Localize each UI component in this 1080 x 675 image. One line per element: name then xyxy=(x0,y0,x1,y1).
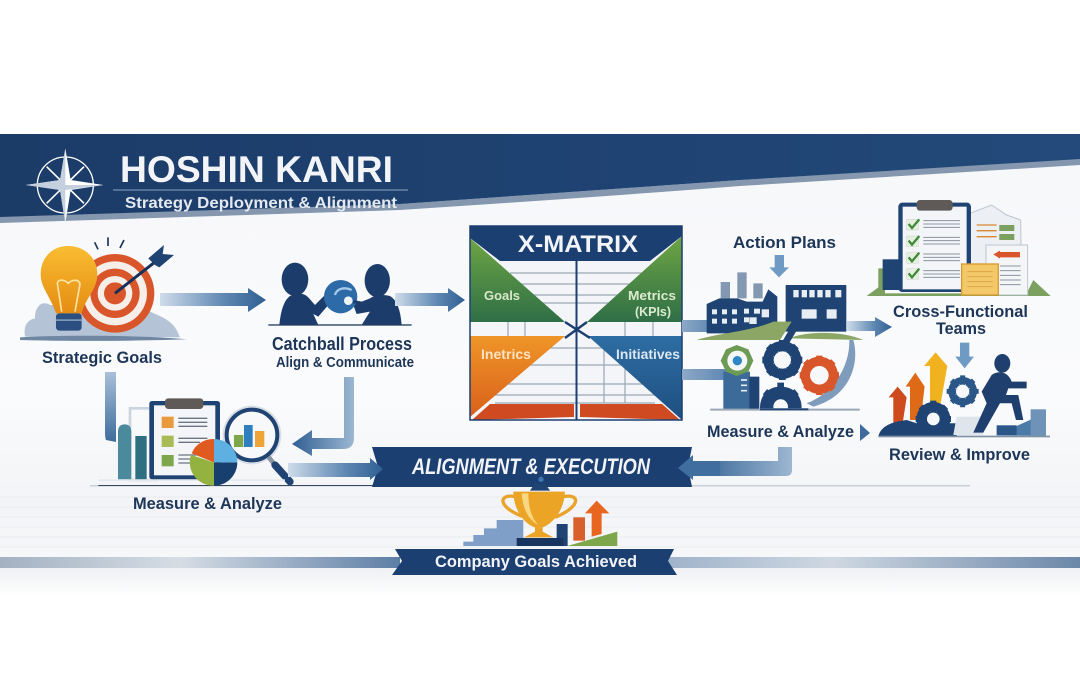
x-matrix xyxy=(470,226,682,420)
arrow: goals to catchball xyxy=(160,288,266,312)
page background xyxy=(0,134,1080,570)
label: action plans: Action Plans xyxy=(733,233,836,252)
title: HOSHIN KANRI xyxy=(120,149,393,190)
arrow tip: right xyxy=(678,455,720,480)
gear: navy upper xyxy=(762,340,802,380)
arrow: to cross-functional xyxy=(847,317,892,337)
icon: catchball people xyxy=(268,263,412,326)
gear: orange xyxy=(800,356,839,395)
label: review and improve: Review & Improve xyxy=(889,445,1030,464)
banner: alignment and execution xyxy=(288,447,720,487)
arrow: action plans down xyxy=(769,255,789,277)
header band xyxy=(0,134,1080,223)
x-matrix label: goals: Goals xyxy=(484,288,520,303)
label: measure and analyze right: Measure & Analyze xyxy=(707,422,854,441)
label: strategic goals: Strategic Goals xyxy=(42,348,162,367)
arrow: vertical left line xyxy=(105,372,116,442)
icon: improvement arrows and runner xyxy=(878,343,1050,437)
banner text: Company Goals Achieved xyxy=(435,552,637,571)
icon: clipboard and documents xyxy=(867,200,1051,296)
arrow: small triangle to review xyxy=(860,424,870,441)
banner: company goals achieved xyxy=(392,549,677,575)
label: catchball process: Catchball Process xyxy=(272,334,412,354)
x-matrix label: inetrics: Inetrics xyxy=(481,347,531,362)
arrow: catchball to x-matrix xyxy=(395,288,465,312)
faint horizontal rule xyxy=(90,485,970,486)
x-matrix label: initiatives: Initiatives xyxy=(616,347,680,362)
gear: navy lower xyxy=(760,383,802,414)
arrow: elbow right to banner xyxy=(692,447,792,476)
strip: lower band xyxy=(0,557,1080,568)
x-matrix title: X-MATRIX xyxy=(518,231,638,258)
label: cross-functional: Cross-Functional xyxy=(893,302,1028,321)
label: measure and analyze left: Measure & Analyze xyxy=(133,494,282,513)
arrow tip: left xyxy=(288,458,383,480)
x-matrix label: kpis: (KPIs) xyxy=(635,304,671,319)
icon: lightbulb and target xyxy=(20,237,187,341)
arrow: elbow from catchball xyxy=(292,377,354,456)
x-matrix label: metrics kpis: Metrics xyxy=(628,288,676,303)
icon: compass xyxy=(26,148,103,223)
icon: clipboard chart magnifier pie xyxy=(98,398,373,486)
arrow: teams down xyxy=(955,343,974,368)
icon: factory and gears xyxy=(697,255,863,414)
banner text: ALIGNMENT & EXECUTION xyxy=(411,454,651,479)
connector bars from x-matrix xyxy=(682,320,726,380)
label: align and communicate: Align & Communicate xyxy=(276,355,414,371)
label: teams: Teams xyxy=(936,319,986,338)
icon: trophy with steps and growth arrow xyxy=(463,477,617,546)
subtitle: Strategy Deployment & Alignment xyxy=(125,195,398,212)
